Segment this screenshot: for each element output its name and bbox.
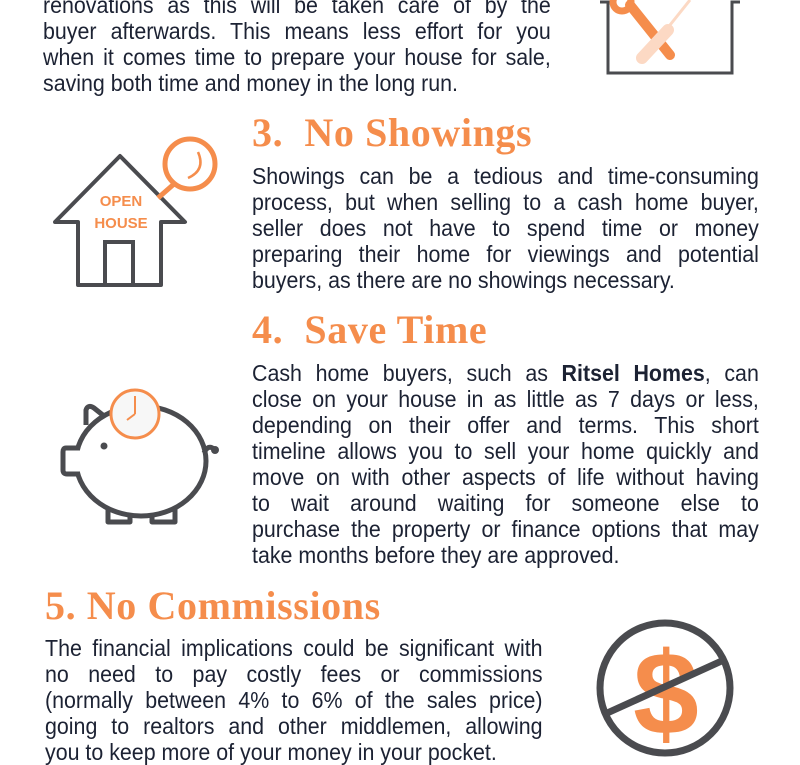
text block: save time: close on your house in as little as 7 days or less, bbox=[252, 386, 759, 412]
icon: no dollar sign bbox=[596, 620, 734, 760]
text block: no commissions bbox=[45, 635, 543, 765]
text block: renovations continuation bbox=[43, 0, 551, 96]
heading: 3. No Showings: 3. No Showings bbox=[252, 110, 532, 155]
icon: open house with magnifier: OPEN bbox=[100, 193, 142, 210]
text block: no commissions: no need to pay costly fees or commissions bbox=[45, 661, 543, 687]
icon: no dollar sign: $ bbox=[633, 628, 699, 760]
icon: open house with magnifier bbox=[53, 136, 218, 287]
text block: no showings: process, but when selling to a cash home buyer, bbox=[252, 189, 759, 215]
text block: no commissions: you to keep more of your money in your pocket. bbox=[45, 739, 497, 765]
text block: no showings: Showings can be a tedious and time-consuming bbox=[252, 163, 759, 189]
text block: save time: take months before they are approved. bbox=[252, 542, 619, 568]
text block: save time: timeline allows you to sell your home quickly and bbox=[252, 438, 759, 464]
heading: 4. Save Time: 4. Save Time bbox=[252, 307, 487, 352]
text block: no showings bbox=[252, 163, 759, 293]
text block: save time: Cash home buyers, such as Ritsel Homes, can bbox=[252, 360, 759, 386]
text block: no commissions: (normally between 4% to 6% of the sales price) bbox=[45, 687, 543, 713]
text block: save time: purchase the property or finance options that may bbox=[252, 516, 759, 542]
text block: no commissions: The financial implications could be significant with bbox=[45, 635, 543, 661]
heading: 5. No Commissions: 5. No Commissions bbox=[45, 583, 381, 628]
text block: save time: move on with other aspects of life without having bbox=[252, 464, 759, 490]
text block: no showings: seller does not have to spend time or money bbox=[252, 215, 759, 241]
icon: open house with magnifier: HOUSE bbox=[94, 215, 148, 232]
text block: save time: to wait around waiting for someone else to bbox=[252, 490, 759, 516]
text block: no commissions: going to realtors and other middlemen, allowing bbox=[45, 713, 543, 739]
text block: save time: depending on their offer and terms. This short bbox=[252, 412, 759, 438]
icon: house with tools bbox=[600, 0, 740, 74]
text block: no showings: buyers, as there are no showings necessary. bbox=[252, 267, 675, 293]
text block: save time bbox=[252, 360, 759, 568]
text block: renovations continuation: when it comes time to prepare your house for sale, bbox=[43, 44, 551, 70]
text block: no showings: preparing their home for viewings and potential bbox=[252, 241, 759, 267]
text block: renovations continuation: saving both time and money in the long run. bbox=[43, 70, 458, 96]
icon: piggy bank with clock bbox=[60, 388, 219, 524]
text block: renovations continuation: buyer afterwards. This means less effort for you bbox=[43, 18, 551, 44]
